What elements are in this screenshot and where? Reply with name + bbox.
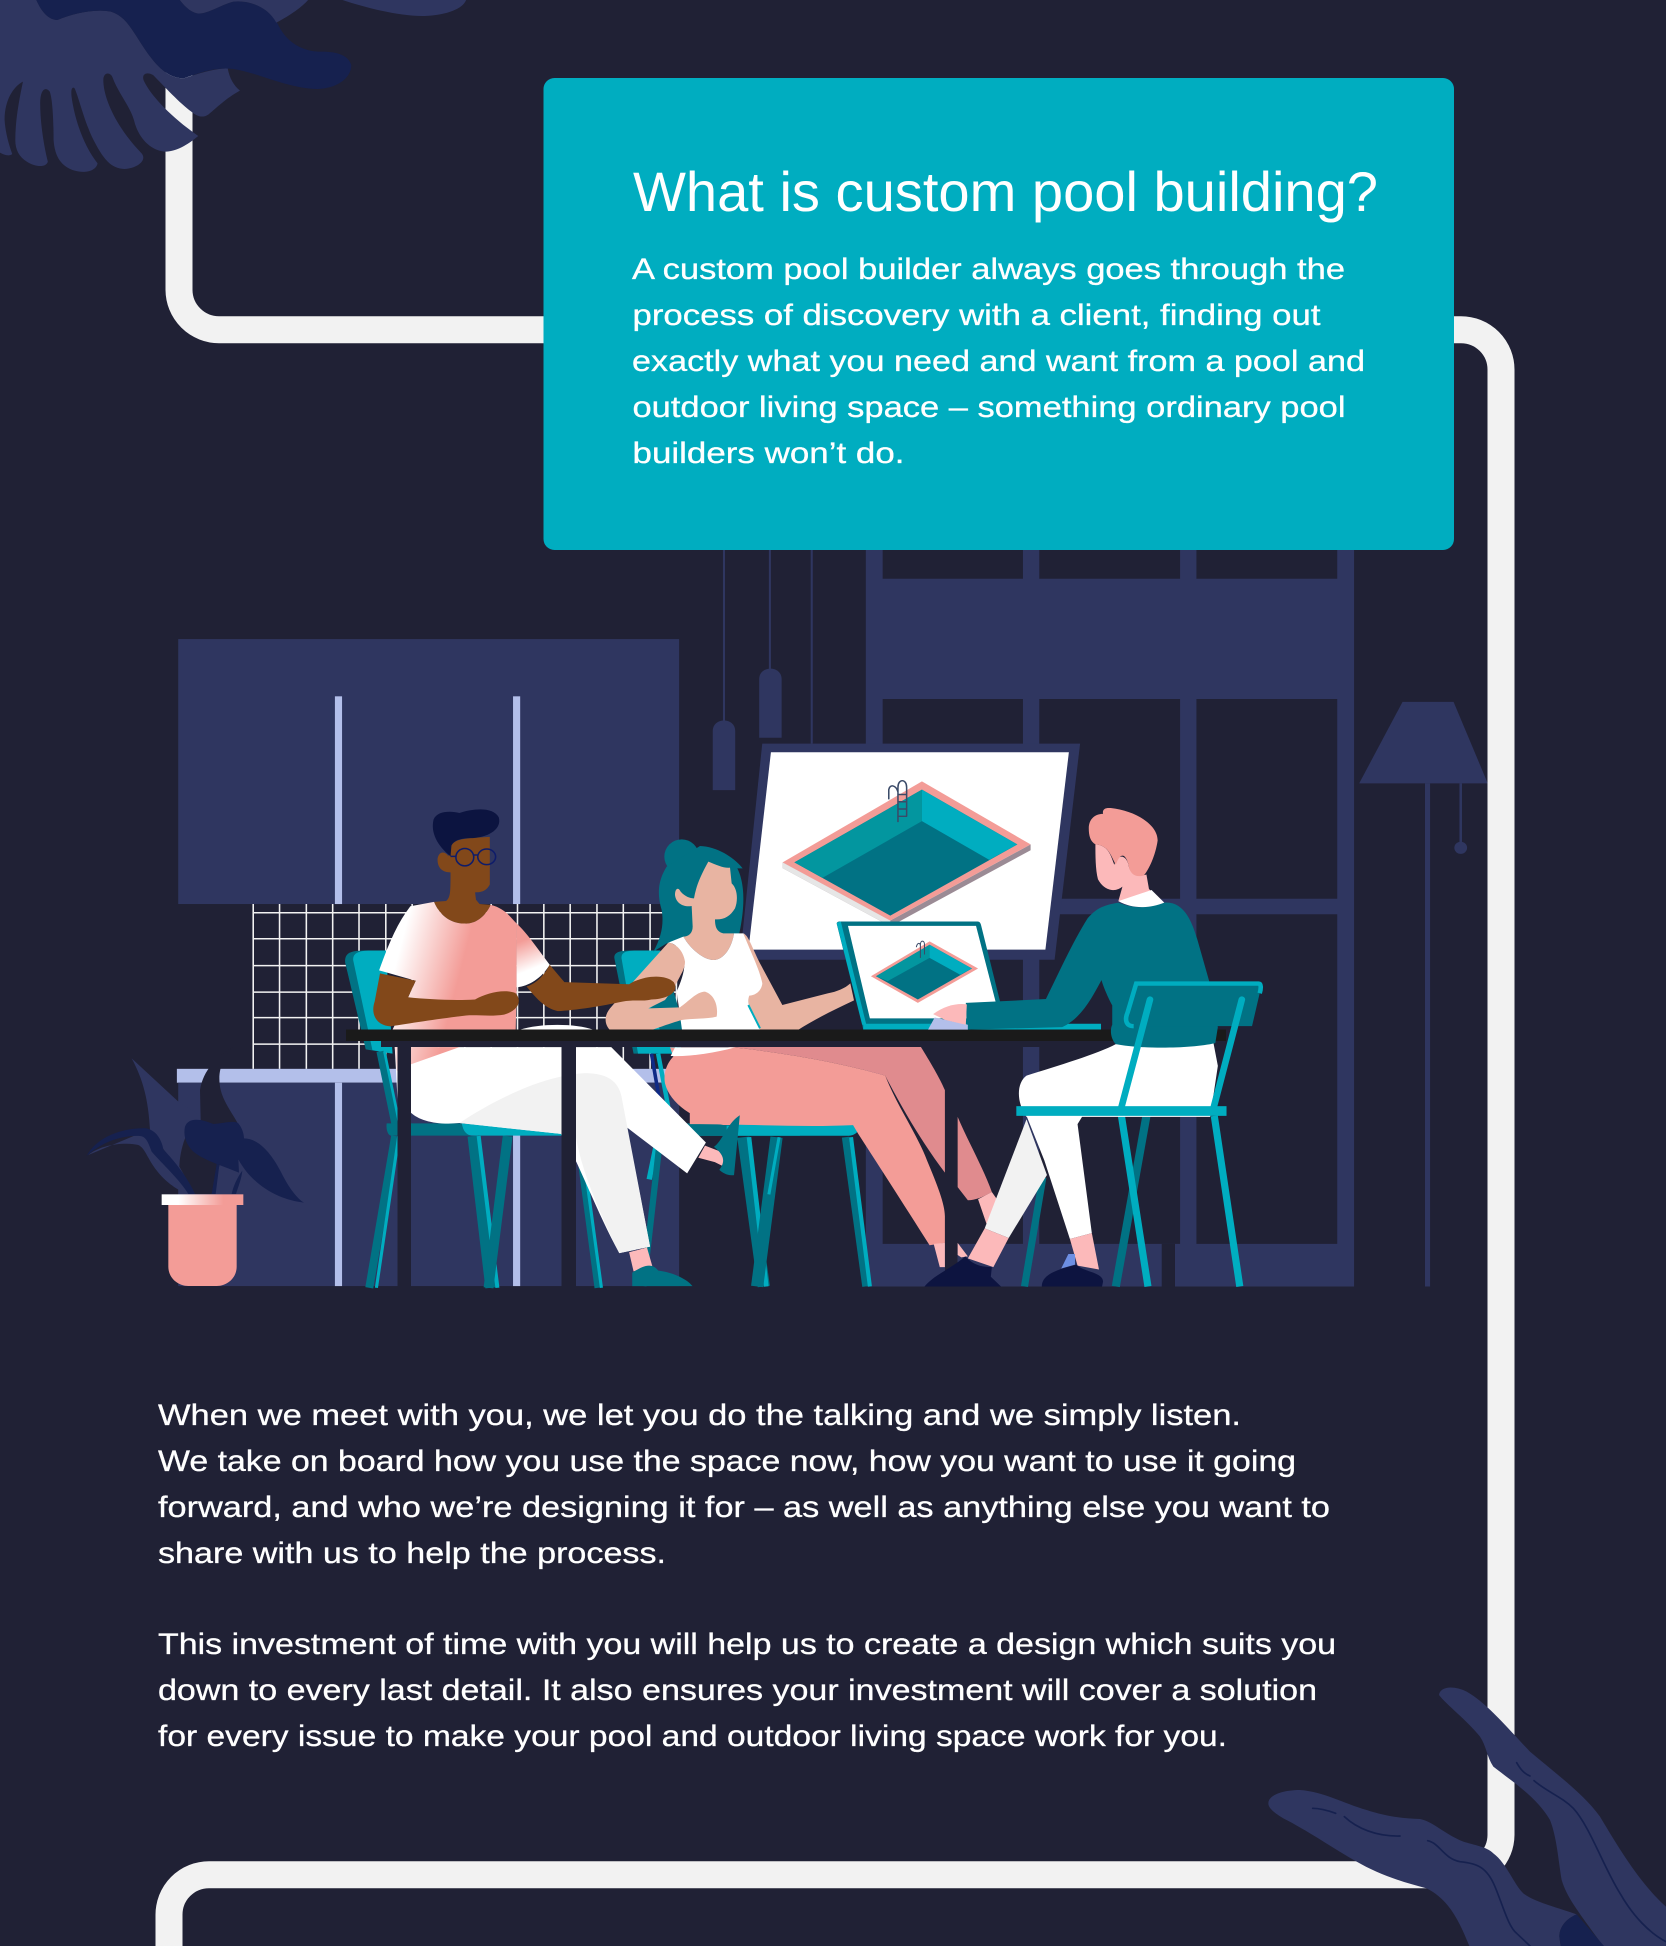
paragraph: discovery meeting: share with us to help the process. [158,1537,666,1570]
left chair seat [387,1123,562,1136]
potted plant [87,1047,304,1286]
intro paragraph: process of discovery with a client, finding out [632,299,1320,332]
decorative leaves: bottom right [1268,1688,1666,1946]
woman: far arm [743,933,854,1031]
man: trousers [395,1047,706,1253]
man: plate [520,1025,593,1030]
presentation board with pool [740,744,1080,960]
middle chair seat [680,1123,800,1136]
woman: hair [650,839,743,1030]
man: hair [433,809,499,856]
man: t-shirt [379,902,517,1030]
window frame, pendant lights and floor lamp [713,550,1488,1287]
connector line: top [179,60,560,330]
right chair: front legs [1121,1116,1240,1286]
man: glasses [451,849,496,866]
man: neck and head [434,837,491,924]
paragraph: discovery meeting: We take on board how you use the space now, how you want to use it going [158,1445,1296,1478]
paragraph: investment of time: for every issue to make your pool and outdoor living space work for you. [158,1720,1227,1753]
intro paragraph: builders won’t do. [632,437,904,470]
heading: What is custom pool building? [633,160,1378,223]
intro paragraph: outdoor living space – something ordinary pool [632,391,1346,424]
intro paragraph [632,253,1365,470]
sweater man: torso [966,903,1218,1048]
sweater man: hand and mouse [928,1017,968,1030]
kitchen cabinets and tiles [177,639,679,1286]
decorative leaves: top left [0,0,466,172]
sweater man: seat trousers [1019,1039,1218,1117]
man: feet [629,1146,725,1271]
sweater man: head [1095,844,1162,901]
woman: shoe [924,1256,1001,1286]
paragraph: investment of time: This investment of time with you will help us to create a design which suits you [158,1628,1336,1661]
paragraph: investment of time: down to every last detail. It also ensures your investment will cover a solution [158,1674,1317,1707]
paragraph: discovery meeting [158,1399,1330,1570]
laptop [837,921,1101,1030]
intro paragraph: A custom pool builder always goes through the [632,253,1345,286]
intro paragraph: exactly what you need and want from a pool and [632,345,1365,378]
woman [606,839,854,1031]
table [346,1030,1226,1287]
right chair: back legs [1116,1116,1146,1286]
woman: top [668,933,762,1030]
man: arms [373,973,519,1026]
connector line: right and bottom [169,330,1501,1946]
right chair: backrest [1126,984,1261,1026]
man with glasses [373,809,740,1286]
paragraph: discovery meeting: When we meet with you, we let you do the talking and we simply listen. [158,1399,1241,1432]
illustration: meeting scene [87,550,1488,1288]
paragraph: discovery meeting: forward, and who we’re designing it for – as well as anything else you want to [158,1491,1330,1524]
man in sweater and right chair [928,808,1261,1286]
paragraph: investment of time [158,1628,1336,1753]
woman: near arm [606,943,717,1030]
woman: trousers [690,1047,997,1267]
woman: face and neck [675,862,737,960]
sweater man: legs [985,1119,1047,1238]
panel: intro card [544,78,1454,550]
right chair: seat [1016,1106,1227,1116]
middle chair [614,950,683,1286]
left chair [345,950,601,1288]
